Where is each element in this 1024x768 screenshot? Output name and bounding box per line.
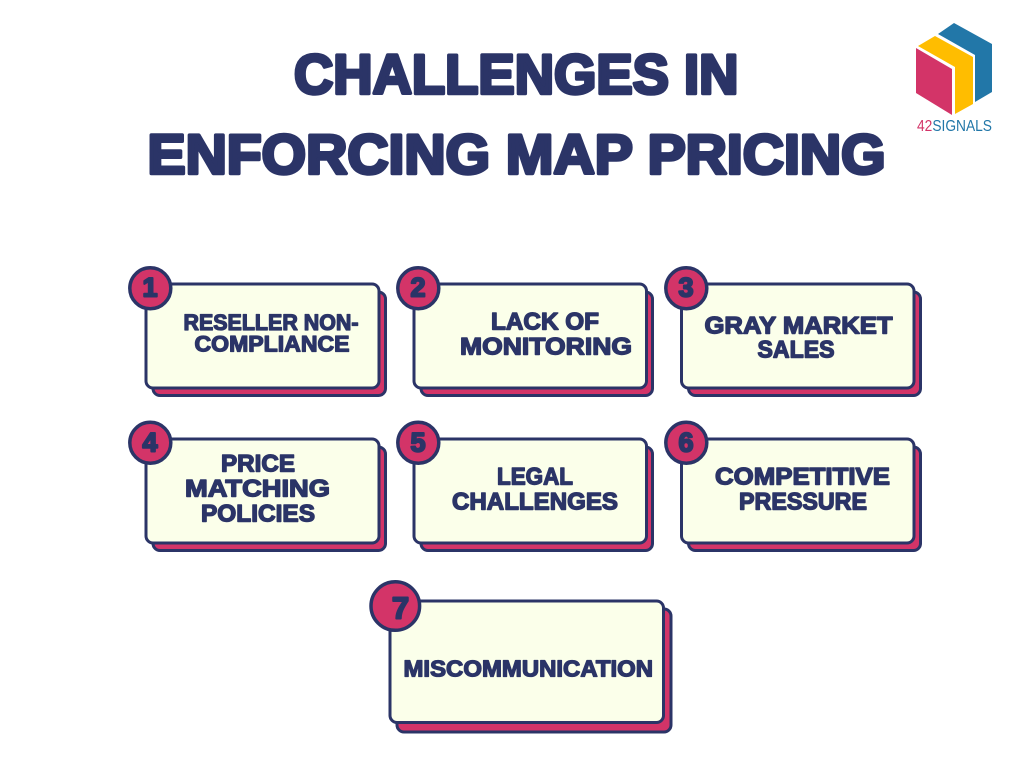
icon: 42signals logo: 42SIGNALS: [917, 118, 992, 135]
panel: miscommunication: MISCOMMUNICATION: [404, 656, 653, 682]
panel: reseller non-compliance: RESELLER NON-: [184, 310, 358, 335]
panel: miscommunication: [371, 582, 671, 732]
panel: lack of monitoring: MONITORING: [460, 334, 632, 360]
panel: gray market sales: [666, 268, 920, 396]
panel: reseller non-compliance: [130, 268, 386, 396]
panel: price matching policies: PRICE: [221, 450, 295, 478]
panel: lack of monitoring: LACK OF: [491, 308, 599, 336]
panel: legal challenges: LEGAL: [497, 464, 573, 490]
panel: gray market sales: SALES: [758, 336, 834, 364]
panel: gray market sales: 3: [678, 272, 694, 302]
panel: competitive pressure: [666, 422, 920, 550]
panel: gray market sales: GRAY MARKET: [704, 312, 893, 340]
panel: legal challenges: CHALLENGES: [452, 488, 618, 516]
icon: 42signals logo: [916, 23, 992, 135]
panel: competitive pressure: COMPETITIVE: [715, 464, 890, 490]
panel: competitive pressure: PRESSURE: [739, 488, 867, 516]
panel: legal challenges: [398, 422, 652, 550]
panel: lack of monitoring: 2: [410, 272, 426, 302]
title: ENFORCING MAP PRICING: [148, 124, 886, 186]
panel: price matching policies: MATCHING: [185, 476, 330, 502]
panel: price matching policies: 4: [142, 428, 158, 458]
panel: legal challenges: 5: [410, 428, 426, 458]
panel: lack of monitoring: [398, 268, 652, 396]
title: [148, 44, 886, 186]
title: CHALLENGES IN: [294, 44, 738, 106]
panel: reseller non-compliance: COMPLIANCE: [194, 332, 350, 356]
panel: reseller non-compliance: 1: [142, 272, 158, 302]
panel: price matching policies: [130, 422, 386, 550]
panel: price matching policies: POLICIES: [201, 500, 315, 528]
panel: competitive pressure: 6: [678, 428, 694, 458]
panel: miscommunication: 7: [392, 590, 409, 626]
